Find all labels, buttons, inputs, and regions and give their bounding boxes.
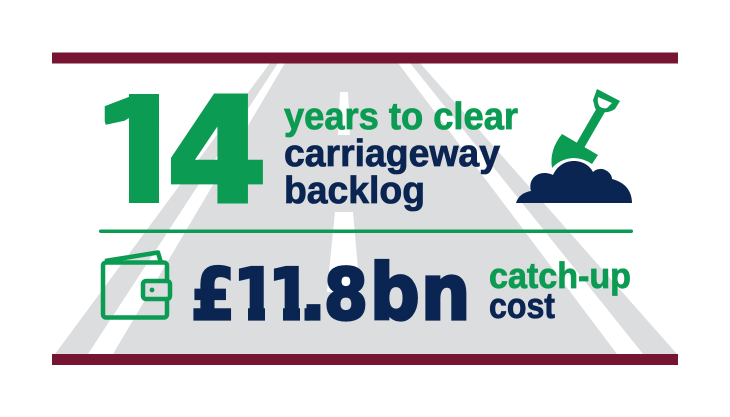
figure: £11.8bn <box>193 258 466 322</box>
heading: years to clear carriageway backlog: backlog <box>284 170 425 212</box>
heading: years to clear carriageway backlog: years to clear <box>284 96 518 138</box>
figure: £11.8bn: bn <box>370 249 470 338</box>
figure: £11.8bn: £11.8 <box>191 254 368 336</box>
top bar <box>52 52 678 64</box>
heading: years to clear carriageway backlog <box>284 96 518 212</box>
label: catch-up cost: cost <box>489 285 555 326</box>
label: catch-up cost: catch-up <box>489 255 631 296</box>
road background <box>55 63 677 354</box>
heading: years to clear carriageway backlog: carriageway <box>284 133 500 175</box>
bottom bar <box>52 354 678 365</box>
big number 14: 1 <box>94 67 189 235</box>
icon: shovel in soil <box>516 89 632 203</box>
label: catch-up cost <box>489 255 631 326</box>
icon: wallet <box>103 252 170 318</box>
big number 14 <box>104 94 263 204</box>
divider line <box>99 230 633 233</box>
big number 14: 4 <box>167 67 267 235</box>
